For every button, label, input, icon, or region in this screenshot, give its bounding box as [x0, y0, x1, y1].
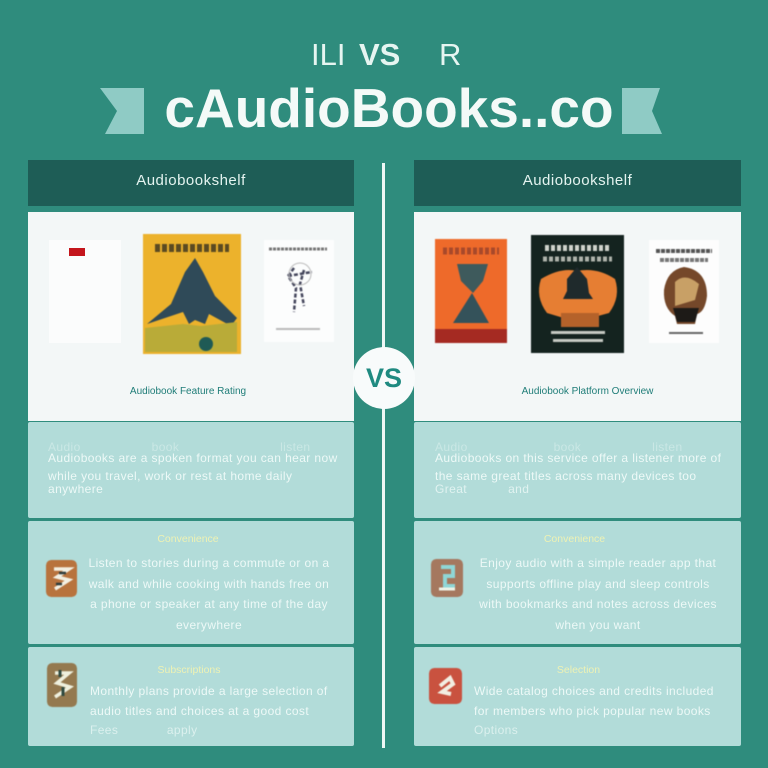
left header	[28, 160, 354, 206]
icon: left feature two	[46, 662, 78, 708]
VS badge	[353, 347, 415, 409]
right feature panel one	[414, 521, 741, 644]
panel: left column	[28, 160, 354, 746]
right intro text	[435, 451, 721, 496]
right feature text two: Options	[474, 723, 518, 737]
right covers panel	[414, 212, 741, 421]
left intro text lines: while you travel, work or rest at home daily	[48, 469, 292, 483]
right feature text two: for members who pick popular new books	[474, 704, 711, 718]
left feature text one: walk and while cooking with hands free on	[89, 576, 329, 590]
left intro text lines	[48, 451, 338, 496]
left feature text one: Listen to stories during a commute or on a	[89, 556, 329, 570]
left intro text lines: anywhere	[48, 482, 103, 496]
right feature text one: supports offline play and sleep controls	[486, 576, 710, 590]
title line: versus: R	[439, 37, 461, 72]
ribbon end: left	[100, 88, 144, 134]
left intro faint text: Audio book listen	[48, 440, 310, 454]
title line: versus	[311, 37, 461, 72]
left feature panel two	[28, 647, 354, 746]
left intro text lines: Audiobooks are a spoken format you can hear now	[48, 451, 338, 465]
left caption: Audiobook Feature Rating	[130, 386, 246, 397]
title banner	[100, 77, 662, 139]
right feature heading one: Convenience	[544, 533, 605, 545]
icon: right feature one	[430, 558, 464, 598]
right feature text one: Enjoy audio with a simple reader app that	[480, 556, 716, 570]
icon: left feature one	[45, 559, 78, 598]
main title: cAudioBooks..co	[164, 77, 614, 139]
red tag	[69, 248, 85, 256]
left feature text one	[88, 556, 329, 632]
left feature text one: a phone or speaker at any time of the day	[90, 597, 328, 611]
cover: white with dark head	[650, 240, 718, 342]
cover: orange hourglass	[434, 238, 508, 344]
left feature heading two: Subscriptions	[157, 664, 221, 676]
right feature text two	[474, 684, 714, 737]
panel: right column	[414, 160, 741, 746]
right header	[414, 160, 741, 206]
cover: white sketch	[265, 241, 333, 341]
right intro panel	[414, 422, 741, 518]
right caption: Audiobook Platform Overview	[522, 386, 653, 397]
left covers panel	[28, 212, 354, 421]
icon: right feature two	[428, 667, 463, 705]
right intro text: Great and	[435, 482, 529, 496]
center divider	[382, 163, 385, 748]
title line: versus: ILI	[311, 37, 345, 72]
right intro text: the same great titles across many devices too	[435, 469, 696, 483]
left feature text two: Monthly plans provide a large selection of	[90, 684, 328, 698]
ribbon end: right	[622, 88, 662, 134]
left feature text two: Fees apply	[90, 723, 198, 737]
right feature panel two	[414, 647, 741, 746]
cover: black with orange figure	[530, 234, 625, 354]
left feature text two	[90, 684, 328, 737]
left feature heading one: Convenience	[157, 533, 219, 545]
left header: Audiobookshelf	[136, 172, 246, 189]
right feature text one: with bookmarks and notes across devices	[479, 597, 717, 611]
right intro faint text: Audio book listen	[435, 440, 683, 454]
left intro panel	[28, 422, 354, 518]
left feature text two: audio titles and choices at a good cost	[90, 704, 309, 718]
cover: blank white with red tag	[49, 240, 121, 343]
title line: versus: VS	[359, 37, 400, 72]
left feature panel one	[28, 521, 354, 644]
cover: yellow with dark creature	[142, 233, 242, 355]
right feature heading two: Selection	[557, 664, 600, 676]
right feature text one	[479, 556, 717, 632]
right feature text one: when you want	[555, 618, 641, 632]
right intro text: Audiobooks on this service offer a listener more of	[435, 451, 721, 465]
right header: Audiobookshelf	[523, 172, 632, 189]
VS badge: VS	[366, 363, 402, 393]
left feature text one: everywhere	[176, 618, 242, 632]
right feature text two: Wide catalog choices and credits included	[474, 684, 714, 698]
